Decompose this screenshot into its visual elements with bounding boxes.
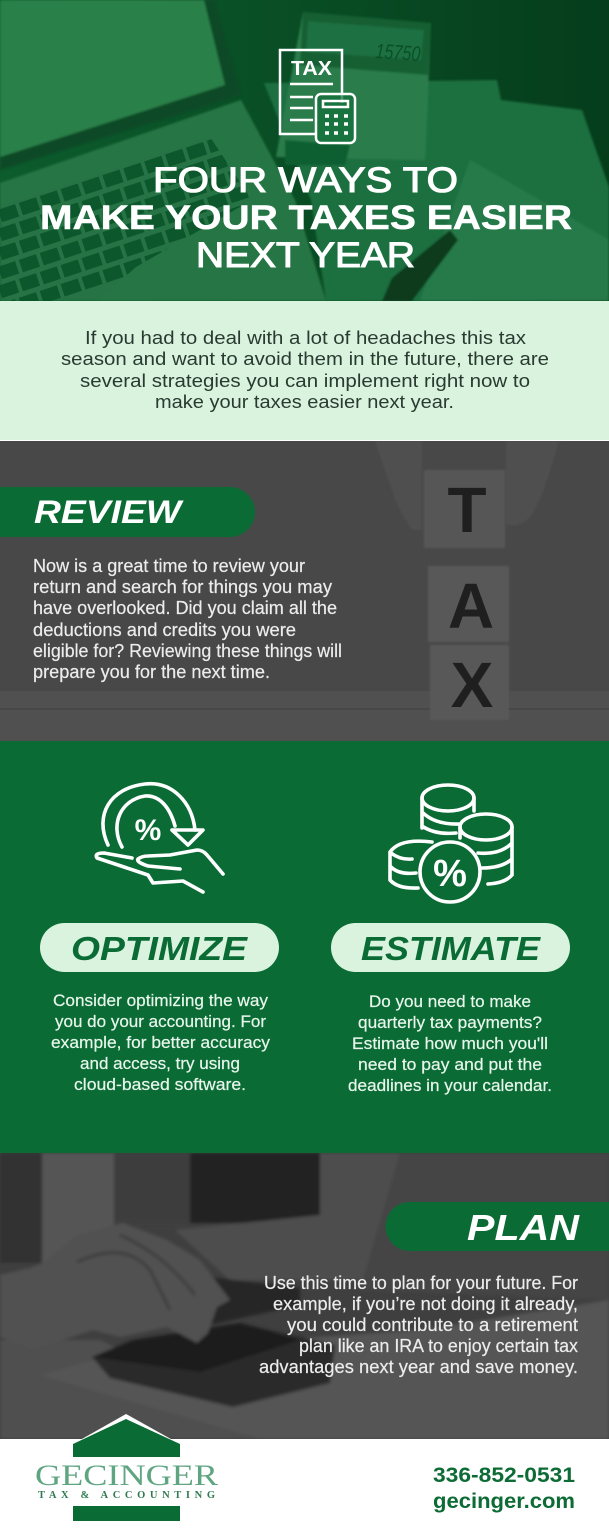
- text block: estimate: Estimate how much you'll: [352, 1035, 548, 1053]
- text block: plan: advantages next year and save money.: [259, 1357, 578, 1377]
- panel: intro: If you had to deal with a lot of headaches this tax: [85, 328, 526, 348]
- panel: review: T: [447, 474, 487, 546]
- text block: review: deductions and credits you were: [33, 620, 296, 640]
- logo: [35, 1414, 218, 1521]
- text block: optimize: example, for better accuracy: [51, 1034, 271, 1052]
- icon: tax document and calculator: [280, 50, 355, 143]
- heading pill: review: REVIEW: [34, 494, 184, 530]
- text block: optimize: [51, 992, 271, 1094]
- text block: estimate: deadlines in your calendar.: [348, 1077, 552, 1095]
- text block: estimate: need to pay and put the: [358, 1056, 542, 1074]
- heading pill: estimate: [331, 923, 570, 972]
- icon: hand with percent: [96, 784, 223, 892]
- text block: plan: Use this time to plan for your future. For: [264, 1273, 578, 1293]
- header photo background: 15750: [375, 40, 421, 66]
- icon: hand with percent: %: [135, 814, 161, 847]
- text block: plan: plan like an IRA to enjoy certain tax: [299, 1336, 578, 1356]
- text block: review: [33, 556, 342, 682]
- panel: plan: [0, 1153, 609, 1439]
- text block: estimate: [348, 993, 552, 1095]
- title: FOUR WAYS TO: [153, 161, 458, 200]
- laptop keyboard rows: [0, 139, 249, 301]
- text block: review: return and search for things you may: [33, 577, 332, 597]
- panel: review: [0, 441, 609, 741]
- icon: coins with percent: %: [433, 853, 467, 895]
- heading pill: optimize: [40, 923, 279, 972]
- text block: estimate: Do you need to make: [369, 993, 531, 1011]
- heading pill: optimize: OPTIMIZE: [71, 930, 248, 967]
- icon label: TAX: TAX: [291, 58, 333, 80]
- photo: hand holding tax blocks: [424, 470, 509, 718]
- panel: review: X: [451, 649, 494, 721]
- text block: plan: [259, 1273, 578, 1377]
- text block: review: have overlooked. Did you claim all the: [33, 598, 337, 618]
- text block: optimize: cloud-based software.: [74, 1076, 246, 1094]
- photo: hand on calculator: [0, 1153, 609, 1439]
- panel: intro: [0, 301, 609, 440]
- title: NEXT YEAR: [196, 236, 415, 275]
- contact: phone and website: [433, 1464, 575, 1513]
- text block: plan: you could contribute to a retirement: [287, 1315, 578, 1335]
- panel: review: A: [448, 570, 494, 642]
- icon: coins with percent: [390, 785, 512, 902]
- heading pill: estimate: ESTIMATE: [361, 930, 541, 967]
- text block: estimate: quarterly tax payments?: [358, 1014, 542, 1032]
- logo: TAX & ACCOUNTING: [38, 1490, 215, 1501]
- panel: footer: [0, 1439, 609, 1536]
- title: MAKE YOUR TAXES EASIER: [40, 199, 572, 237]
- panel: intro: several strategies you can implement right now to: [80, 371, 530, 391]
- heading pill: plan: [386, 1202, 609, 1251]
- text block: optimize: you do your accounting. For: [55, 1013, 267, 1031]
- contact: phone and website: 336-852-0531: [433, 1464, 575, 1487]
- text block: review: Now is a great time to review your: [33, 556, 305, 576]
- text block: optimize: Consider optimizing the way: [53, 992, 269, 1010]
- logo: GECINGER: [35, 1459, 218, 1492]
- heading pill: plan: PLAN: [467, 1207, 580, 1248]
- text block: optimize: and access, try using: [80, 1055, 240, 1073]
- header photo background: [0, 0, 609, 311]
- panel: intro: season and want to avoid them in the future, there are: [61, 349, 549, 369]
- text block: plan: example, if you’re not doing it already,: [273, 1294, 578, 1314]
- heading pill: review: [0, 487, 255, 537]
- text block: review: eligible for? Reviewing these things will: [33, 641, 342, 661]
- contact: phone and website: gecinger.com: [433, 1490, 575, 1513]
- text block: review: prepare you for the next time.: [33, 662, 270, 682]
- panel: green section: [0, 741, 609, 1153]
- title: [40, 161, 572, 275]
- panel: intro: make your taxes easier next year.: [155, 392, 454, 412]
